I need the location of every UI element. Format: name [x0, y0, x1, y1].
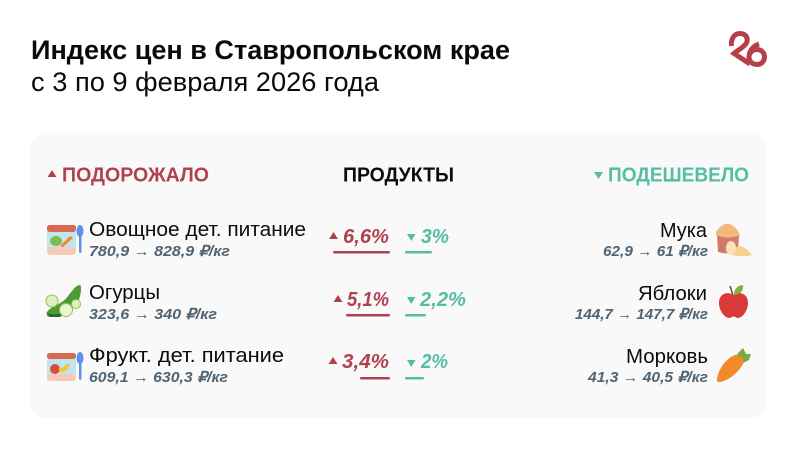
change row 3: 2% [420, 351, 448, 373]
icon: apple [719, 285, 748, 318]
title [31, 35, 510, 97]
row: carrot: 41,3 → 40,5 ₽/кг [587, 369, 708, 386]
row: flour [603, 220, 708, 260]
icon: logo 26 [731, 34, 764, 64]
change row 1 [329, 226, 449, 254]
row: cucumbers: Огурцы [89, 282, 160, 304]
row: flour: 62,9 → 61 ₽/кг [603, 243, 708, 260]
row: fruit baby food: Фрукт. дет. питание [89, 345, 284, 367]
panel: price table [30, 133, 767, 418]
row: carrot [587, 346, 708, 386]
icon: vegetable baby food jar [47, 225, 84, 255]
change row 2: 5,1% [347, 289, 389, 311]
row: apples: Яблоки [638, 283, 707, 305]
row: vegetable baby food: Овощное дет. питание [89, 219, 306, 241]
heading: went down: ПОДЕШЕВЕЛО [608, 164, 749, 186]
title: с 3 по 9 февраля 2026 года [31, 67, 379, 97]
row: fruit baby food [89, 345, 284, 386]
heading: products: ПРОДУКТЫ [343, 164, 454, 186]
heading: went up: ПОДОРОЖАЛО [62, 164, 209, 186]
row: fruit baby food: 609,1 → 630,3 ₽/кг [89, 369, 228, 386]
icon: carrot [717, 348, 751, 382]
row: apples: 144,7 → 147,7 ₽/кг [575, 306, 708, 323]
row: cucumbers [89, 282, 217, 323]
row: cucumbers: 323,6 → 340 ₽/кг [89, 306, 217, 323]
row: apples [575, 283, 708, 323]
change row 2: 2,2% [419, 289, 466, 311]
title: Индекс цен в Ставропольском крае [31, 35, 510, 65]
change row 1: 3% [421, 226, 449, 248]
change row 2 [334, 289, 466, 316]
row: carrot: Морковь [626, 346, 708, 368]
row: vegetable baby food [89, 219, 306, 260]
change row 3: 3,4% [342, 351, 389, 373]
icon: fruit baby food jar [47, 352, 84, 381]
icon: flour [716, 224, 752, 256]
row: vegetable baby food: 780,9 → 828,9 ₽/кг [89, 243, 230, 260]
row: flour: Мука [660, 220, 708, 242]
icon: cucumber [46, 285, 81, 317]
change row 3 [328, 351, 448, 380]
change row 1: 6,6% [343, 226, 389, 248]
